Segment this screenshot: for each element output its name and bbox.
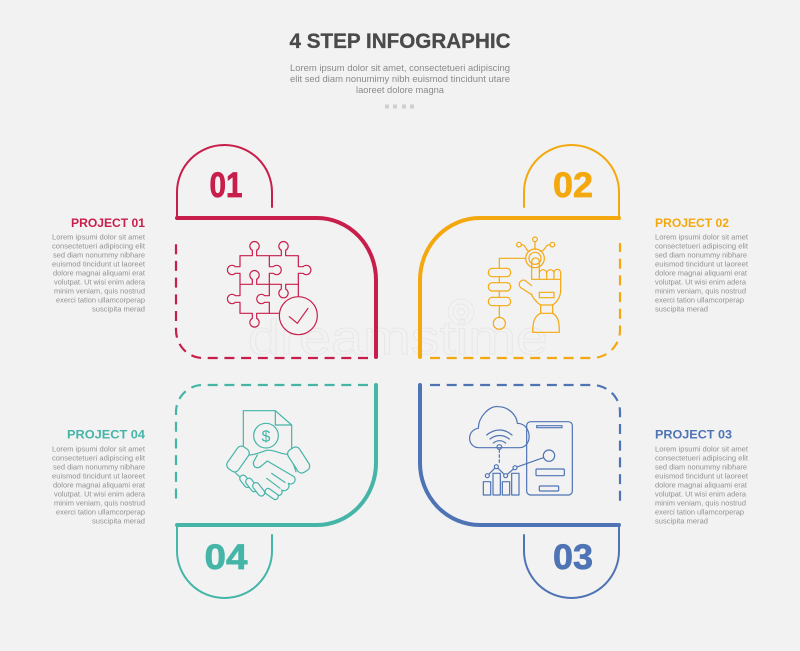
text block: project 01: minim veniam, quis nostrud	[54, 286, 145, 296]
text block: project 02: euismod tincidunt ut laoreet	[655, 260, 749, 268]
text block: project 02: suscipita merad	[655, 304, 708, 314]
text block: project 04: suscipita merad	[92, 516, 145, 526]
text block: project 02: dolore magnai aliquami erat	[655, 268, 748, 278]
text block: project 04: dolore magnai aliquami erat	[53, 480, 146, 490]
text block: project 04: consectetueri adipiscing elit	[52, 454, 146, 462]
text block: project 02: consectetueri adipiscing elit	[655, 242, 749, 250]
dashed outline	[430, 385, 620, 502]
panel: step 04	[176, 385, 376, 598]
icon: cloud and phone analytics	[470, 407, 572, 495]
text block: project 02: volutpat. Ut wisi enim adera	[655, 278, 747, 286]
dashed outline	[430, 243, 620, 358]
text block: project 01: dolore magnai aliquami erat	[53, 268, 146, 278]
text block: project 01: sed diam nonummy nibhare	[53, 250, 145, 260]
subtitle: laoreet dolore magna	[356, 85, 445, 95]
panel: step 01	[176, 145, 376, 358]
text block: project 04: volutpat. Ut wisi enim adera	[54, 490, 146, 498]
solid outline	[177, 218, 376, 357]
icon: puzzle with check	[227, 242, 317, 335]
watermark	[248, 299, 548, 365]
text block: project 01: euismod tincidunt ut laoreet	[52, 260, 146, 268]
text block: project 01: Lorem ipsumi dolor sit amet	[52, 232, 146, 242]
text block: project 03: exerci tation ullamcorperap	[655, 508, 744, 516]
text block: project 04: exerci tation ullamcorperap	[56, 508, 145, 516]
text block: project 04: Lorem ipsumi dolor sit amet	[52, 444, 146, 454]
solid outline	[177, 385, 376, 525]
number tab 03	[524, 525, 619, 598]
number tab 04	[177, 525, 272, 598]
icon: handshake with dollar document	[225, 411, 312, 501]
number 04: 04	[204, 538, 248, 577]
text block: project 01: volutpat. Ut wisi enim adera	[54, 278, 146, 286]
text block: project 02: exerci tation ullamcorperap	[655, 296, 744, 304]
text block: project 03: sed diam nonummy nibhare	[655, 462, 747, 472]
icon: handshake with dollar document: $	[262, 428, 271, 445]
text block: project 01: suscipita merad	[92, 304, 145, 314]
text block: project 03: volutpat. Ut wisi enim adera	[655, 490, 747, 498]
panel: step 03	[420, 385, 620, 598]
dashed outline	[176, 385, 368, 500]
text block: project 02: sed diam nonummy nibhare	[655, 250, 747, 260]
text block: project 03	[655, 428, 749, 526]
panel: step 02	[420, 145, 620, 358]
subtitle: Lorem ipsum dolor sit amet, consectetueri adipiscing	[290, 63, 510, 73]
text block: project 04: minim veniam, quis nostrud	[54, 498, 145, 508]
text block: project 04: PROJECT 04	[67, 428, 145, 442]
text block: project 01: consectetueri adipiscing elit	[52, 242, 146, 250]
number tab 02	[524, 145, 619, 218]
solid outline	[420, 218, 619, 357]
dashed outline	[176, 243, 368, 358]
text block: project 02: PROJECT 02	[655, 216, 729, 230]
text block: project 03: PROJECT 03	[655, 428, 732, 442]
subtitle: elit sed diam nonumimy nibh euismod tincidunt utare	[290, 74, 510, 84]
text block: project 01: exerci tation ullamcorperap	[56, 296, 145, 304]
number 03: 03	[553, 538, 593, 577]
text block: project 04: sed diam nonummy nibhare	[53, 462, 145, 472]
subtitle	[290, 63, 510, 95]
text block: project 02: Lorem ipsumi dolor sit amet	[655, 232, 749, 242]
text block: project 02	[655, 216, 749, 314]
text block: project 02: minim veniam, quis nostrud	[655, 286, 746, 296]
text block: project 03: dolore magnai aliquami erat	[655, 480, 748, 490]
text block: project 01: PROJECT 01	[71, 216, 145, 230]
number tab 01	[177, 145, 272, 218]
text block: project 04	[52, 428, 146, 526]
number 02: 02	[553, 166, 593, 205]
text block: project 03: minim veniam, quis nostrud	[655, 498, 746, 508]
text block: project 04: euismod tincidunt ut laoreet	[52, 472, 146, 480]
text block: project 03: consectetueri adipiscing elit	[655, 454, 749, 462]
text block: project 01	[52, 216, 146, 314]
icon: robot hand	[488, 237, 561, 332]
pagination dots	[385, 104, 414, 108]
text block: project 03: Lorem ipsumi dolor sit amet	[655, 444, 749, 454]
watermark: dreamstime	[248, 312, 548, 365]
text block: project 03: euismod tincidunt ut laoreet	[655, 472, 749, 480]
text block: project 03: suscipita merad	[655, 516, 708, 526]
number 01: 01	[210, 166, 242, 205]
title: 4 STEP INFOGRAPHIC	[290, 30, 510, 53]
solid outline	[420, 385, 619, 525]
